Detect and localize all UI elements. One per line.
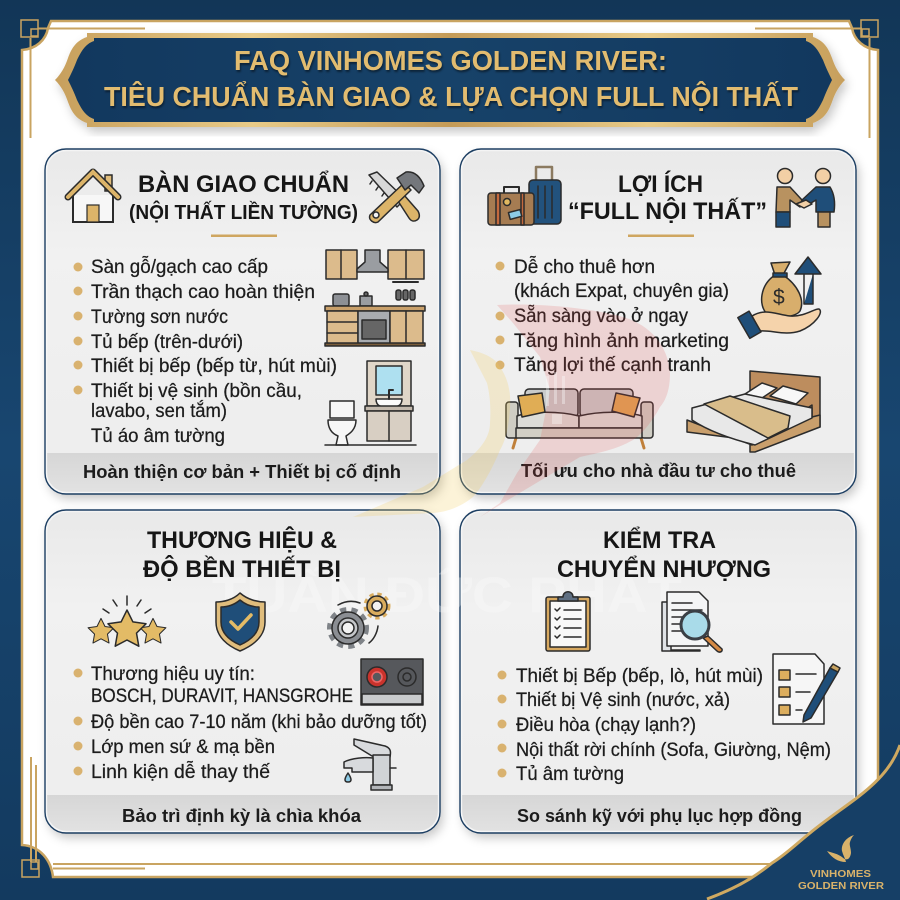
card 4 heading: CHUYỂN NHƯỢNG <box>557 555 771 583</box>
title banner <box>55 33 845 127</box>
bullet list: lợi ích: Tăng hình ảnh marketing <box>514 331 729 352</box>
title text <box>104 45 798 112</box>
bullet list: thương hiệu: Độ bền cao 7-10 năm (khi bảo dưỡng tốt) <box>91 712 427 733</box>
icon: clipboard <box>546 592 590 651</box>
bullet list: thương hiệu: Thương hiệu uy tín: <box>91 664 255 685</box>
bullet list: kiểm tra: Nội thất rời chính (Sofa, Giường, Nệm) <box>516 740 831 761</box>
bullet list: bàn giao chuẩn: Trần thạch cao hoàn thiện <box>91 282 315 303</box>
watermark name: TUẤN ĐỨC PHÁT <box>212 567 682 623</box>
bullet list: lợi ích: Sẵn sàng vào ở ngay <box>514 306 688 327</box>
icon: bed <box>687 371 820 452</box>
brand logo: VINHOMES <box>810 868 871 880</box>
icon: sofa <box>506 389 653 448</box>
bullet list: bàn giao chuẩn: lavabo, sen tắm) <box>91 400 227 422</box>
bullet list: bàn giao chuẩn: Tường sơn nước <box>91 307 228 328</box>
bullet list: lợi ích: (khách Expat, chuyên gia) <box>514 281 729 302</box>
brand logo: GOLDEN RIVER <box>798 880 884 892</box>
card 2 heading <box>568 170 767 237</box>
bullet list: bàn giao chuẩn: Thiết bị bếp (bếp từ, hút mùi) <box>91 356 337 377</box>
bullet list: thương hiệu <box>74 664 427 783</box>
panel: lợi ích full nội thất <box>460 149 856 494</box>
icon: kitchen <box>325 250 425 346</box>
card 3 heading: ĐỘ BỀN THIẾT BỊ <box>143 555 341 583</box>
bullet list: thương hiệu: Linh kiện dễ thay thế <box>91 761 270 783</box>
icon: shield with check <box>216 593 265 651</box>
logo mark <box>827 835 854 862</box>
card 4 heading <box>557 526 771 583</box>
icon: three stars <box>88 596 166 646</box>
bullet list: kiểm tra: Điều hòa (chạy lạnh?) <box>516 715 696 736</box>
bullet list: bàn giao chuẩn: Thiết bị vệ sinh (bồn cầu, <box>91 381 302 402</box>
card 1 heading: BÀN GIAO CHUẨN <box>138 170 349 198</box>
card 3 heading <box>143 526 341 583</box>
bullet list: bàn giao chuẩn: Tủ áo âm tường <box>91 426 225 447</box>
bullet list: lợi ích: Tăng lợi thế cạnh tranh <box>514 355 711 376</box>
bullet list: kiểm tra <box>498 666 831 785</box>
card 1 heading: (NỘI THẤT LIỀN TƯỜNG) <box>129 200 358 224</box>
card 4 heading: KIỂM TRA <box>603 526 716 554</box>
card 3 heading: THƯƠNG HIỆU & <box>147 526 337 554</box>
icon: house <box>68 172 118 222</box>
icon: faucet <box>344 739 396 790</box>
icon: luggage <box>488 167 561 225</box>
icon: handshake <box>776 168 835 227</box>
bullet list: kiểm tra: Thiết bị Bếp (bếp, lò, hút mùi) <box>516 666 763 687</box>
card 2 heading: “FULL NỘI THẤT” <box>568 197 767 225</box>
panel: kiểm tra chuyển nhượng <box>460 510 856 833</box>
card 2 footer text: Tối ưu cho nhà đầu tư cho thuê <box>521 461 796 481</box>
bullet list: bàn giao chuẩn: Sàn gỗ/gạch cao cấp <box>91 256 268 278</box>
icon: cooktop <box>361 659 423 705</box>
watermark logo <box>353 305 670 517</box>
icon: checklist and pen <box>773 654 840 724</box>
card 1 footer text: Hoàn thiện cơ bản + Thiết bị cố định <box>83 462 401 482</box>
bullet list: lợi ích: Dễ cho thuê hơn <box>514 256 655 278</box>
bullet list: kiểm tra: Thiết bị Vệ sinh (nước, xả) <box>516 690 730 711</box>
card 2 heading: LỢI ÍCH <box>618 170 703 198</box>
card 3 footer text: Bảo trì định kỳ là chìa khóa <box>122 806 362 826</box>
bullet list: bàn giao chuẩn <box>74 256 337 447</box>
icon: money bag in hand with arrow <box>738 257 821 338</box>
bullet list: lợi ích <box>496 256 729 376</box>
icon: gears <box>330 595 388 646</box>
bullet list: thương hiệu: Lớp men sứ & mạ bền <box>91 737 275 758</box>
icon: bathroom <box>325 361 416 445</box>
card 4 footer text: So sánh kỹ với phụ lục hợp đồng <box>517 806 802 826</box>
title text: FAQ VINHOMES GOLDEN RIVER: <box>234 45 667 76</box>
icon: documents and magnifier <box>662 592 722 652</box>
icon: saw and hammer <box>369 172 424 223</box>
bullet list: thương hiệu: BOSCH, DURAVIT, HANSGROHE <box>91 686 353 707</box>
card 1 heading <box>129 170 358 237</box>
panel: thương hiệu và độ bền <box>45 510 440 833</box>
panel: bàn giao chuẩn <box>45 149 440 494</box>
bullet list: bàn giao chuẩn: Tủ bếp (trên-dưới) <box>91 332 243 353</box>
bullet list: kiểm tra: Tủ âm tường <box>516 764 624 785</box>
icon: money bag in hand with arrow: $ <box>773 286 785 309</box>
bottom right corner swoosh <box>702 745 900 900</box>
title text: TIÊU CHUẨN BÀN GIAO & LỰA CHỌN FULL NỘI THẤT <box>104 80 798 112</box>
brand logo <box>798 835 884 892</box>
